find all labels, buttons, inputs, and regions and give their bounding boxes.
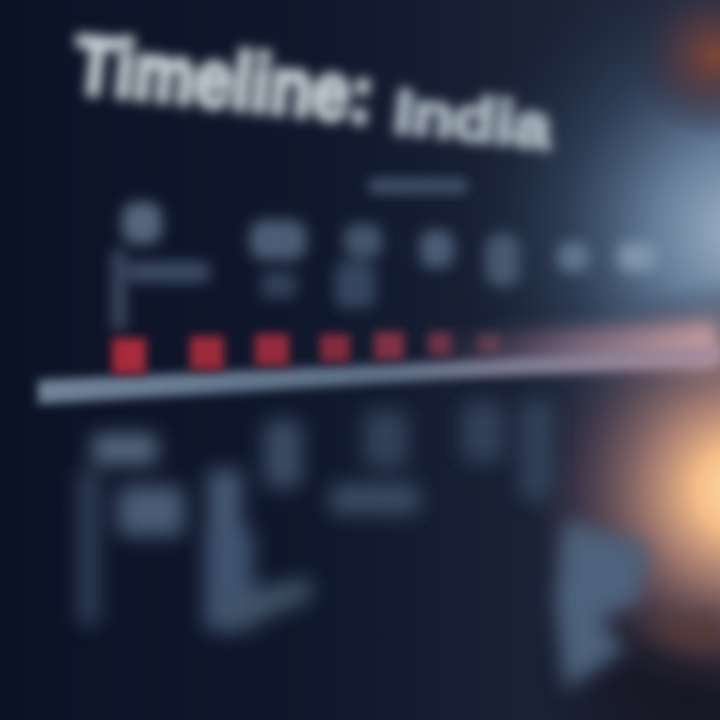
lower timeline labels	[78, 400, 650, 690]
upper label 4	[420, 230, 454, 268]
lower column 1	[78, 434, 184, 625]
lower column 5	[555, 520, 650, 690]
timeline bar	[38, 346, 720, 404]
lower column 4	[462, 400, 554, 500]
upper label 6	[558, 242, 590, 272]
upper timeline labels	[112, 202, 658, 330]
lower column 3	[264, 410, 420, 514]
title: Timeline:	[70, 19, 378, 141]
title	[70, 19, 555, 162]
upper label 5	[486, 234, 520, 286]
upper label 3	[335, 224, 382, 308]
pink light band	[430, 320, 720, 366]
title: India	[391, 77, 555, 162]
lower column 2	[205, 470, 312, 635]
upper label 1	[112, 202, 210, 330]
upper label 7	[618, 242, 658, 272]
red markers	[112, 332, 500, 374]
subtitle	[368, 178, 468, 194]
upper label 2	[250, 220, 306, 298]
